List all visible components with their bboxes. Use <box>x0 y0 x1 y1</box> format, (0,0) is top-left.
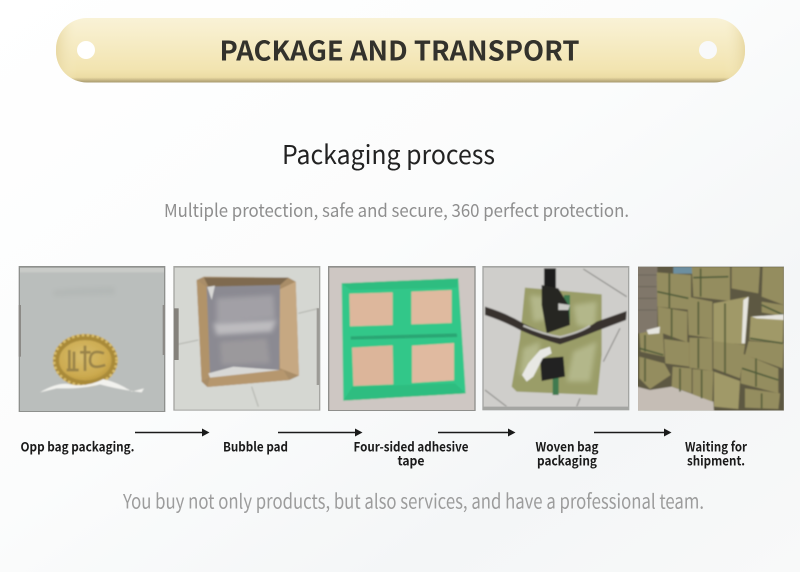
label: woven bag packaging: packaging <box>537 450 597 470</box>
arrow 3 <box>438 428 516 436</box>
arrow 1 <box>135 428 210 436</box>
photo 1: opp bag with coin <box>17 265 167 413</box>
icon: gold coin <box>53 334 118 387</box>
subheading: packaging process: Packaging process <box>282 135 495 172</box>
text block: service statement: You buy not only products, but also services, and have a professional team. <box>122 486 704 514</box>
photo 2: bubble pad in carton <box>172 265 322 412</box>
label: bubble pad: Bubble pad <box>223 436 288 456</box>
title banner <box>56 18 745 82</box>
photo 4: woven bag packaging <box>482 265 630 410</box>
label: waiting for shipment: Waiting for <box>685 436 747 456</box>
label: woven bag packaging: Woven bag <box>536 436 599 456</box>
label: opp bag packaging: Opp bag packaging. <box>20 436 134 456</box>
photo 5: stacked parcels waiting for shipment <box>637 265 785 412</box>
label: four-sided adhesive tape: Four-sided adhesive <box>354 436 468 456</box>
arrow 4 <box>594 428 672 436</box>
photo 3: four-sided adhesive tape <box>327 265 477 412</box>
label: four-sided adhesive tape: tape <box>398 450 424 470</box>
label: four-sided adhesive tape <box>354 436 468 470</box>
heading: package and transport: PACKAGE AND TRANSPORT <box>220 30 580 68</box>
label: woven bag packaging <box>536 436 599 470</box>
cardboard windows <box>349 290 454 386</box>
text block: protection tagline: Multiple protection, safe and secure, 360 perfect protection. <box>164 197 629 223</box>
label: waiting for shipment: shipment. <box>687 450 745 470</box>
arrow 2 <box>278 428 362 436</box>
label: waiting for shipment <box>685 436 747 470</box>
